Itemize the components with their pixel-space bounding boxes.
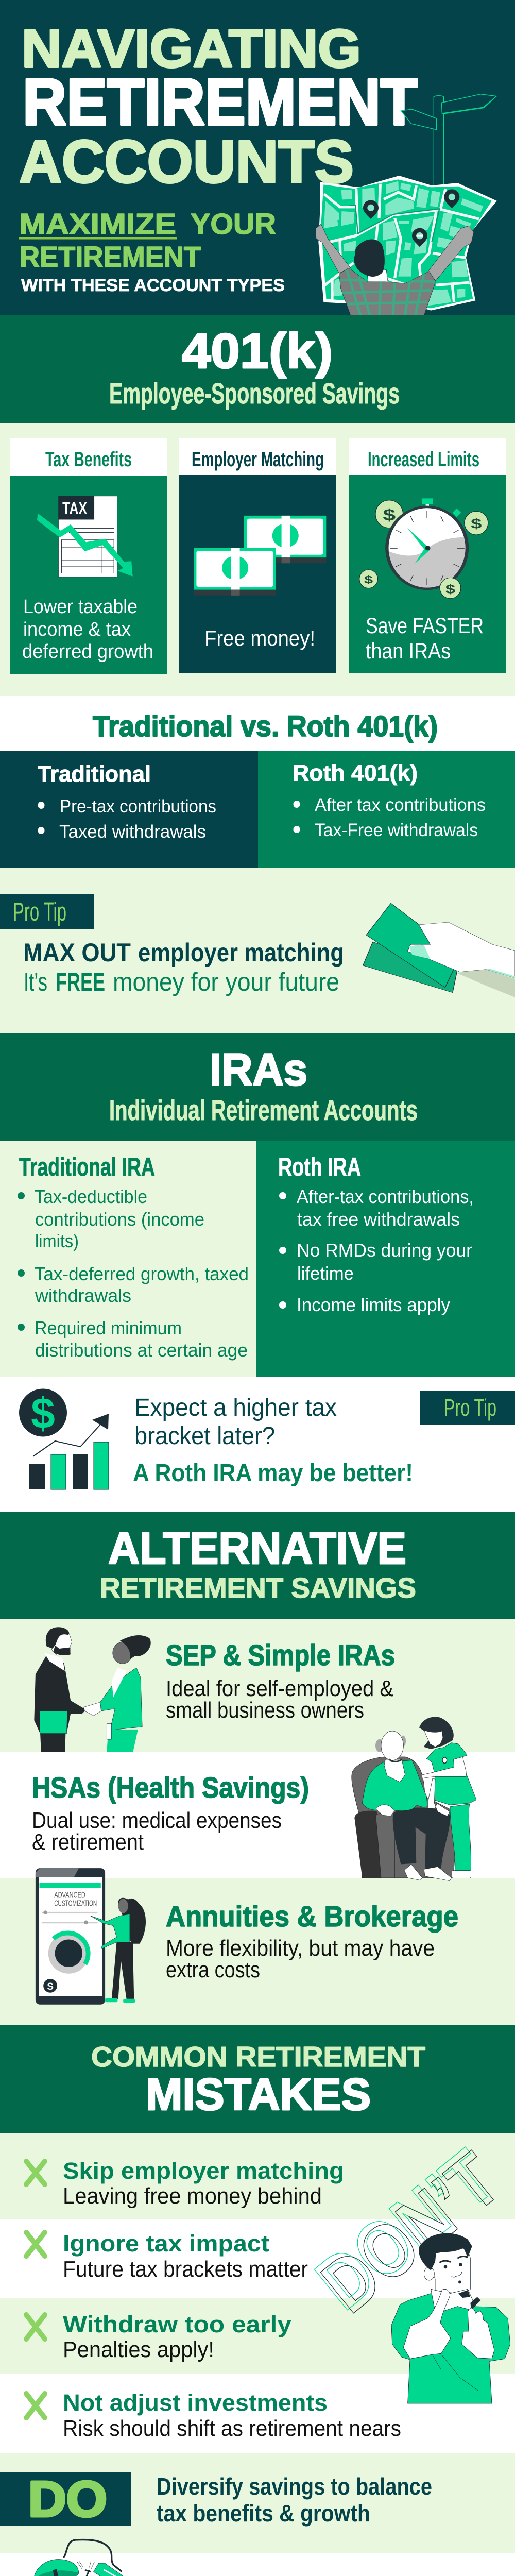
panel: roth IRA: No RMDs during your	[297, 1240, 472, 1261]
panel: annuities and brokerage: extra costs	[166, 1957, 260, 1982]
mistake: skip employer matching	[26, 2158, 344, 2209]
icon: stopwatch with coins	[359, 498, 488, 599]
panel: annuities and brokerage: Annuities & Brokerage	[166, 1900, 458, 1933]
icon: dollar bills	[194, 516, 326, 596]
panel: alternative retirement savings header	[0, 1512, 515, 1619]
mistake: withdraw too early	[26, 2311, 291, 2362]
panel: traditional IRA	[0, 1141, 256, 1377]
icon: growth chart with dollar coin	[19, 1389, 109, 1489]
icon: alarm clock	[7, 2540, 149, 2576]
mistake: ignore tax impact	[26, 2230, 308, 2282]
panel: HSAs: & retirement	[32, 1829, 144, 1855]
text: expect a higher tax bracket: bracket later?	[134, 1422, 275, 1450]
panel: roth IRA: Income limits apply	[297, 1294, 450, 1315]
icon: map pins	[363, 189, 459, 247]
panel: do advice	[0, 2453, 515, 2553]
heading: alternative: ALTERNATIVE	[108, 1523, 406, 1573]
mistake: not adjust investments: Risk should shift as retirement nears	[63, 2416, 401, 2441]
illustration: man gesturing stop	[391, 2233, 510, 2403]
panel: traditional IRA: Required minimum	[35, 1317, 182, 1338]
panel: SEP and simple IRAs: small business owners	[166, 1698, 364, 1723]
panel: traditional IRA: withdrawals	[35, 1285, 131, 1306]
card: employer matching: Employer Matching	[192, 448, 324, 471]
illustration: phone with advisor	[36, 1868, 146, 2005]
column: roth 401(k): After tax contributions	[315, 795, 486, 815]
panel: secure your future	[0, 2553, 515, 2576]
column: traditional: Traditional	[38, 761, 151, 787]
mistake: not adjust investments	[26, 2389, 401, 2441]
panel: roth IRA: tax free withdrawals	[297, 1209, 460, 1230]
panel: 401(k) benefit cards	[0, 423, 515, 696]
subtitle: maximize your retirement: YOUR	[191, 208, 276, 241]
text: expect a higher tax bracket: A Roth IRA may be better!	[133, 1460, 413, 1487]
panel: SEP and simple IRAs: SEP & Simple IRAs	[166, 1639, 395, 1672]
panel: roth IRA: Roth IRA	[278, 1153, 361, 1181]
subtitle: maximize your retirement	[19, 208, 285, 295]
column: traditional	[0, 751, 258, 868]
column: roth 401(k): Roth 401(k)	[293, 760, 418, 786]
title: navigating retirement accounts: ACCOUNTS	[19, 128, 354, 195]
subheading: retirement savings: RETIREMENT SAVINGS	[100, 1572, 416, 1604]
panel: traditional IRA: Tax-deferred growth, taxed	[35, 1263, 249, 1284]
icon: tax document with falling arrow: TAX	[62, 499, 87, 518]
title: navigating retirement accounts	[19, 19, 418, 195]
illustration: phone with advisor: S	[47, 1981, 54, 1992]
panel: traditional IRA: limits)	[35, 1230, 79, 1251]
mistake: ignore tax impact: Ignore tax impact	[63, 2230, 269, 2257]
panel: IRA header	[0, 1033, 515, 1141]
card: tax benefits: Lower taxable	[23, 596, 138, 618]
panel: hero	[0, 0, 515, 315]
panel: roth IRA: After-tax contributions,	[297, 1186, 474, 1207]
card: tax benefits: Tax Benefits	[45, 448, 132, 471]
heading: mistakes: MISTAKES	[146, 2070, 371, 2120]
column: roth 401(k)	[258, 751, 515, 868]
subtitle: maximize your retirement: MAXIMIZE	[19, 208, 176, 241]
panel: 401(k) header	[0, 315, 515, 423]
subtitle: maximize your retirement: WITH THESE ACCOUNT TYPES	[21, 276, 285, 295]
card: tax benefits: deferred growth	[22, 641, 153, 663]
card: tax benefits: income & tax	[23, 619, 131, 640]
panel: roth IRA	[256, 1141, 515, 1377]
illustration: person reading a map	[316, 176, 497, 315]
card: increased limits: than IRAs	[366, 639, 451, 664]
text: expect a higher tax bracket: Expect a higher tax	[134, 1394, 337, 1421]
mistake: withdraw too early: Withdraw too early	[63, 2311, 291, 2337]
mistake: skip employer matching: Leaving free money behind	[63, 2183, 322, 2209]
illustration: nurse with senior man in armchair	[352, 1717, 476, 1881]
icon: signpost	[401, 94, 496, 186]
column: roth 401(k): Tax-Free withdrawals	[315, 820, 478, 840]
card: employer matching	[179, 438, 336, 673]
text: max out employer matching: It’s	[24, 968, 47, 996]
mistake: withdraw too early: Penalties apply!	[63, 2337, 214, 2362]
mistake: ignore tax impact: Future tax brackets matter	[63, 2257, 308, 2282]
illustration: phone with advisor: CUSTOMIZATION	[54, 1899, 97, 1908]
icon: stopwatch with coins: $	[364, 573, 373, 586]
panel: roth IRA pro tip	[0, 1377, 515, 1512]
mistake: not adjust investments: Not adjust investments	[63, 2389, 328, 2416]
panel: common mistakes header	[0, 2025, 515, 2133]
panel: SEP and simple IRAs	[0, 1619, 515, 1752]
text: max out employer matching: money for your future	[113, 968, 339, 996]
panel: HSAs	[0, 1752, 515, 1878]
panel: traditional IRA: distributions at certain age	[35, 1340, 248, 1361]
illustration: phone with advisor: ADVANCED	[54, 1891, 85, 1900]
column: traditional: Pre-tax contributions	[60, 796, 216, 817]
panel: traditional IRA: Traditional IRA	[19, 1153, 155, 1181]
illustration: handshake	[34, 1627, 151, 1752]
card: tax benefits	[10, 438, 167, 674]
panel: do advice: Diversify savings to balance	[157, 2473, 432, 2500]
card: increased limits	[349, 438, 506, 673]
heading: 401(k): 401(k)	[182, 324, 333, 379]
panel: HSAs: Dual use: medical expenses	[32, 1808, 282, 1833]
icon: stopwatch with coins: $	[471, 516, 482, 531]
text: max out employer matching	[23, 938, 344, 996]
icon: growth chart with dollar coin: $	[31, 1389, 55, 1437]
panel: HSAs: HSAs (Health Savings)	[32, 1771, 309, 1804]
badge: do	[0, 2471, 131, 2527]
card: increased limits: Save FASTER	[366, 614, 484, 638]
panel: roth IRA: lifetime	[297, 1263, 354, 1284]
mistake: skip employer matching: Skip employer matching	[63, 2158, 344, 2184]
subtitle: maximize your retirement: RETIREMENT	[20, 241, 201, 274]
panel: annuities and brokerage	[0, 1878, 515, 2025]
title: navigating retirement accounts: NAVIGATING	[22, 19, 361, 79]
badge: pro tip: Pro Tip	[13, 897, 66, 926]
column: traditional: Taxed withdrawals	[59, 822, 206, 842]
heading: traditional vs. roth 401(k): Traditional vs. Roth 401(k)	[93, 710, 438, 743]
panel: pro tip employer matching	[0, 868, 515, 1033]
text: max out employer matching: FREE	[56, 968, 105, 996]
title: navigating retirement accounts: RETIREMENT	[23, 65, 418, 139]
panel: traditional IRA: contributions (income	[35, 1209, 204, 1230]
icon: stopwatch with coins: $	[445, 582, 456, 596]
heading: common retirement: COMMON RETIREMENT	[91, 2041, 425, 2073]
heading: IRAs: IRAs	[210, 1045, 307, 1095]
card: employer matching: Free money!	[204, 626, 315, 650]
badge: do: DO	[28, 2471, 107, 2527]
panel: traditional vs roth	[0, 696, 515, 868]
text: max out employer matching: MAX OUT	[23, 938, 131, 967]
panel: annuities and brokerage: More flexibility, but may have	[166, 1936, 435, 1961]
panel: do advice: tax benefits & growth	[157, 2500, 370, 2527]
illustration: hand holding money	[363, 903, 515, 997]
icon: stopwatch with coins: $	[383, 506, 396, 524]
badge: pro tip	[420, 1391, 515, 1425]
panel: SEP and simple IRAs: Ideal for self-employed &	[166, 1676, 393, 1701]
text: max out employer matching: employer matching	[138, 938, 344, 967]
icon: tax document with falling arrow	[37, 496, 133, 577]
panel: mistakes list	[0, 2133, 515, 2453]
text: expect a higher tax bracket	[133, 1394, 413, 1487]
panel: traditional IRA: Tax-deductible	[35, 1186, 147, 1207]
